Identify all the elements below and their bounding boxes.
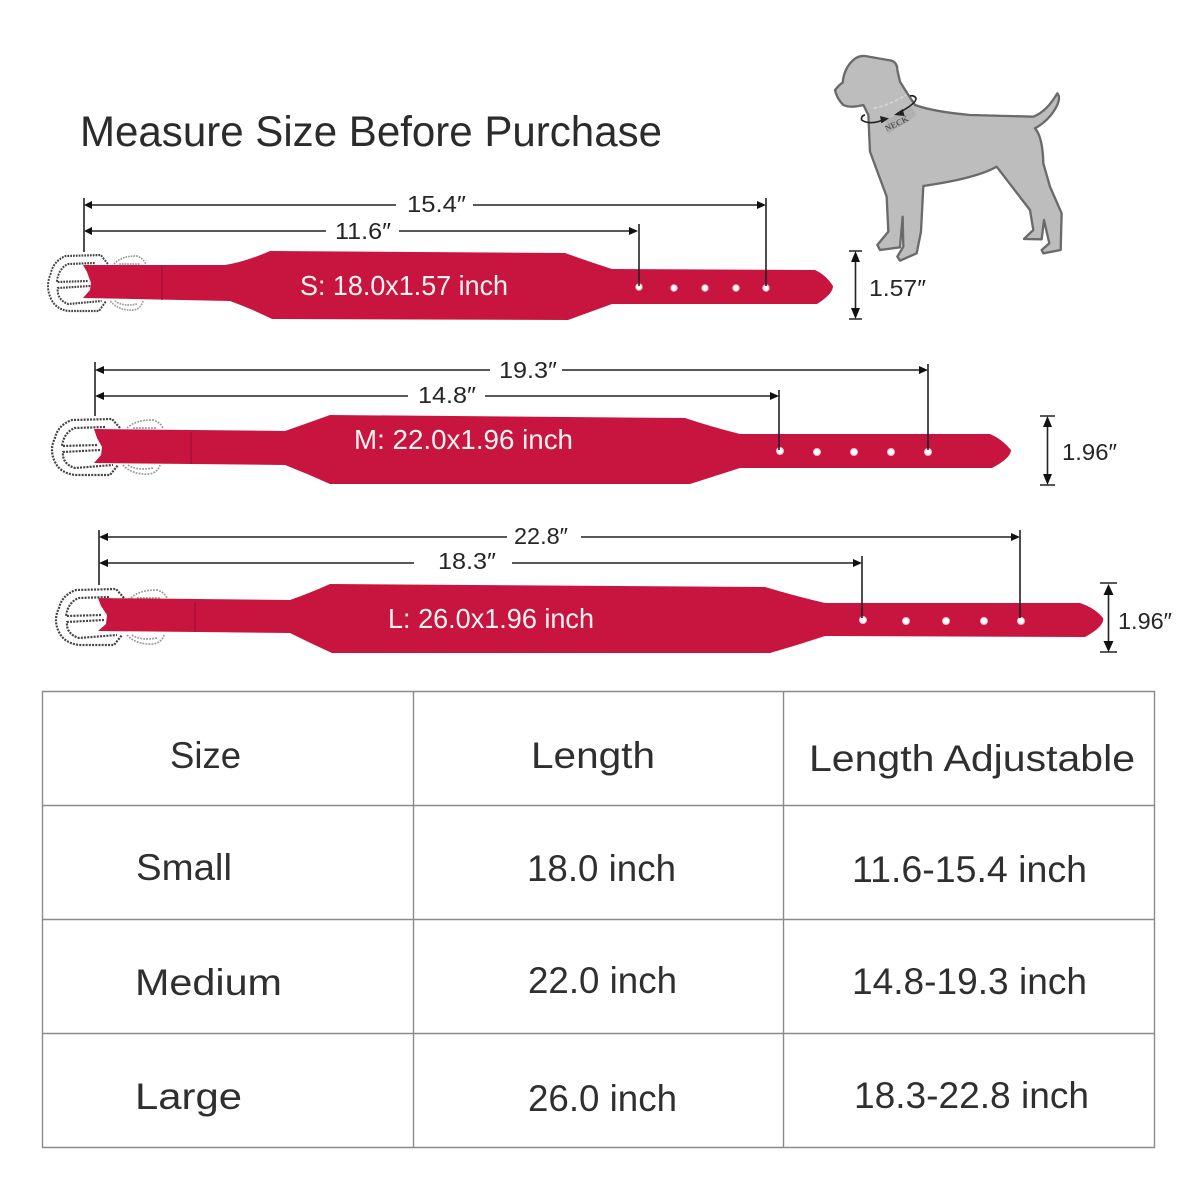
dimension 19.3: 14.8″ [418,382,476,408]
icon: dog silhouette with neck measurement [835,56,1062,261]
collar strap L [98,584,1103,653]
dimension 22.8: 22.8″ [514,523,568,549]
icon: buckle M [52,419,163,475]
dimension 22.8: 18.3″ [438,548,496,574]
holes S [636,284,769,291]
dimension 15.4: 11.6″ [335,218,391,244]
holes M [776,448,932,456]
collar label S: S: 18.0x1.57 inch [300,270,508,301]
row: large [135,1075,1089,1119]
height 1.57: 1.57″ [869,275,926,301]
collar label M: M: 22.0x1.96 inch [354,424,573,455]
row: large: Large [135,1076,242,1117]
collar strap S [83,251,833,320]
icon: buckle L [56,589,167,645]
collar strap M [94,415,1011,484]
row: medium [135,960,1087,1003]
dimension 15.4 [84,191,766,286]
row: small: 18.0 inch [527,848,676,889]
row: medium: 22.0 inch [528,960,677,1001]
height 1.96 L: 1.96″ [1118,608,1172,634]
row: large: 26.0 inch [528,1078,677,1119]
dimension 19.3: 19.3″ [499,357,557,383]
height 1.96 M [1040,416,1117,485]
icon: dog silhouette with neck measurement: NECK [883,113,910,133]
table header: length: Length [531,735,655,776]
size table [42,691,1154,1148]
small collar [48,191,926,320]
table header: size: Size [170,735,241,776]
row: small: 11.6-15.4 inch [852,849,1087,890]
row: large: 18.3-22.8 inch [854,1075,1089,1116]
height 1.96 M: 1.96″ [1062,439,1117,465]
row: medium: 14.8-19.3 inch [852,961,1087,1002]
collar label L: L: 26.0x1.96 inch [388,603,594,634]
large collar [56,523,1172,653]
row: small [136,847,1087,890]
table header: length adjustable: Length Adjustable [809,738,1135,779]
medium collar [52,357,1117,485]
icon: buckle S [48,255,146,311]
height 1.96 L [1100,583,1172,652]
dimension 15.4: 15.4″ [407,191,466,217]
title: Measure Size Before Purchase [80,108,662,156]
holes L [860,616,1024,624]
dimension 22.8 [99,523,1020,618]
row: small: Small [136,847,232,888]
dimension 19.3 [95,357,928,450]
height 1.57 [849,251,926,319]
row: medium: Medium [135,962,282,1003]
